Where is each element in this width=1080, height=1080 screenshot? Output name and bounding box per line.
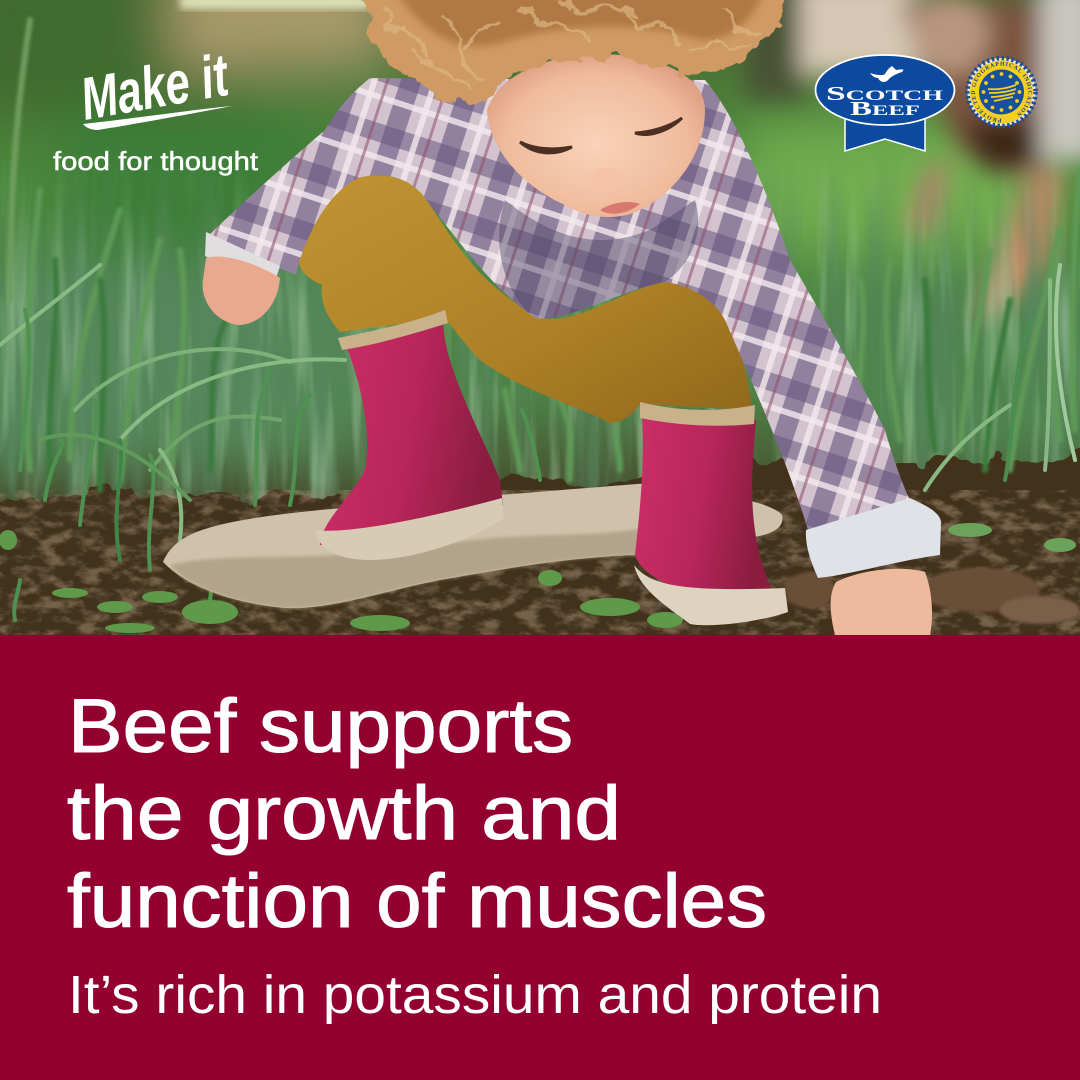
logo wordmark second line: B EEF	[850, 98, 920, 120]
shirt	[206, 78, 910, 530]
background building and blurred adult	[745, 0, 1080, 320]
face	[487, 54, 705, 217]
soil	[0, 448, 1080, 635]
heading	[67, 684, 767, 944]
subheading: It’s rich in potassium and protein	[68, 965, 882, 1025]
seal text: PROTECTED GEOGRAPHICAL INDICATION	[971, 62, 1032, 122]
panel: maroon headline band	[0, 635, 1080, 1080]
logo: Make it food for thought	[53, 41, 259, 176]
heading: function of muscles	[67, 859, 767, 944]
logo: Scotch Beef	[816, 55, 954, 151]
logo: protected geographical indication seal	[965, 56, 1038, 128]
photo: toddler in a vegetable patch	[0, 0, 1080, 680]
logo underline swoosh	[83, 106, 232, 130]
grass texture	[0, 176, 1080, 506]
right boot	[634, 402, 788, 625]
far grass blades, soft	[10, 20, 1080, 490]
logo tagline: food for thought	[53, 146, 259, 176]
stone slab	[163, 483, 782, 608]
logo wordmark: Make it: Make it	[76, 41, 235, 133]
left boot	[315, 310, 504, 560]
icon: thistle	[870, 66, 903, 82]
near grass blades	[0, 265, 1075, 620]
heading: the growth and	[67, 771, 621, 856]
trousers	[299, 175, 752, 423]
seal field stripes	[988, 85, 1016, 101]
seedlings on the soil	[0, 523, 1076, 633]
seal stars	[982, 72, 1021, 112]
right cuff and hand	[806, 498, 941, 635]
heading: Beef supports	[68, 684, 573, 769]
blurred background	[0, 0, 1080, 460]
curly blond hair	[365, 0, 785, 104]
logo wordmark: S COTCH	[826, 83, 944, 105]
left cuff and hand	[203, 232, 280, 325]
